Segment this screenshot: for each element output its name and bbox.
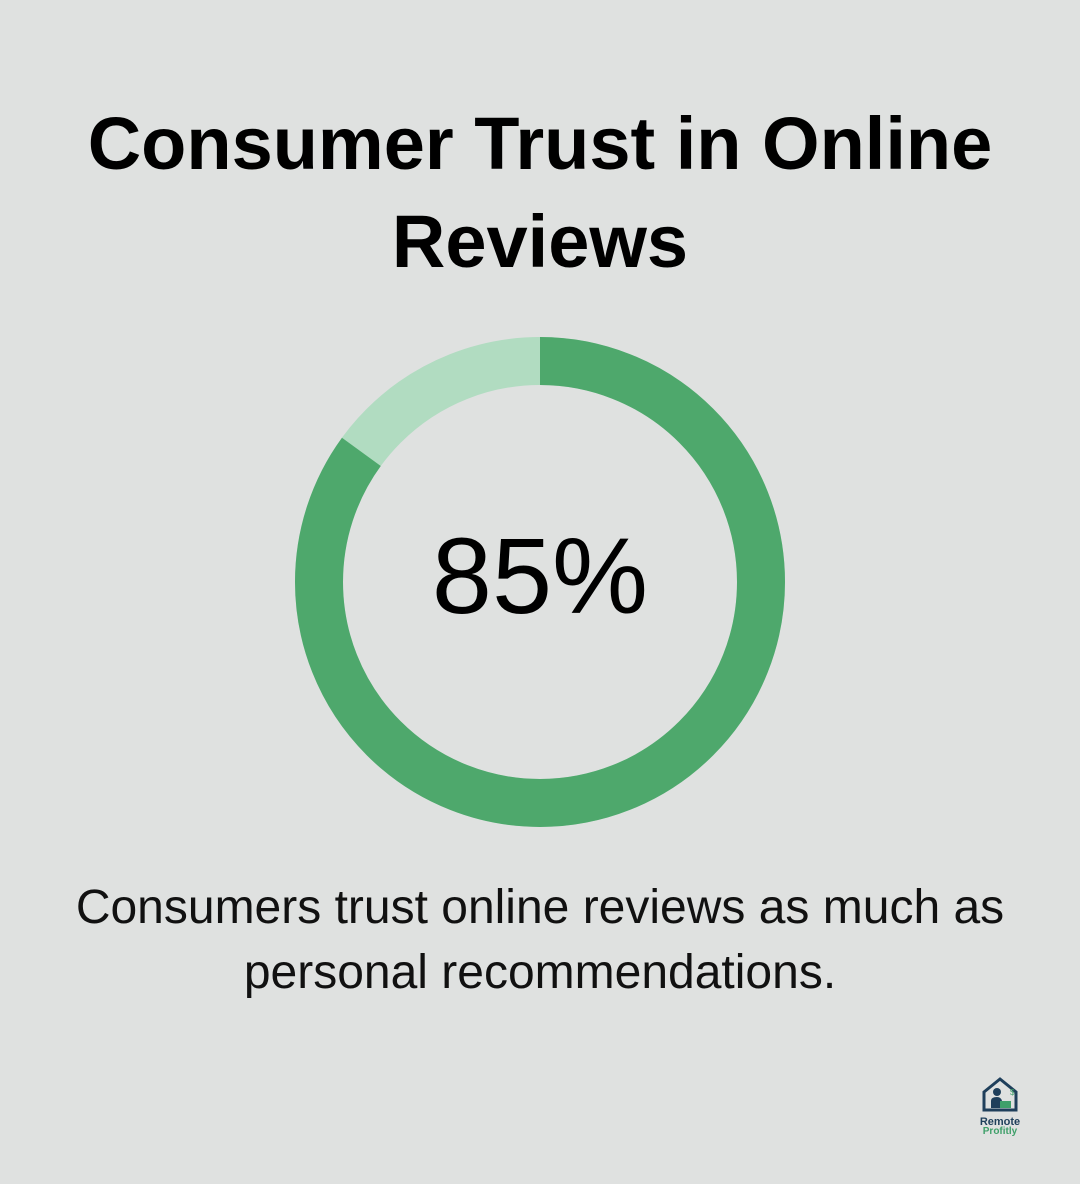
title: Reviews xyxy=(392,200,688,283)
donut remainder segment xyxy=(319,361,761,803)
logo: Remote xyxy=(980,1116,1020,1128)
description text: personal recommendations. xyxy=(244,946,836,999)
title xyxy=(88,102,992,283)
logo: $ xyxy=(1010,1088,1015,1097)
percentage value: 85% xyxy=(432,515,648,636)
description text xyxy=(76,881,1004,999)
logo xyxy=(980,1077,1020,1137)
title: Consumer Trust in Online xyxy=(88,102,992,185)
donut 85% segment xyxy=(319,361,761,803)
logo: Profitly xyxy=(983,1126,1017,1137)
description text: Consumers trust online reviews as much as xyxy=(76,881,1004,934)
